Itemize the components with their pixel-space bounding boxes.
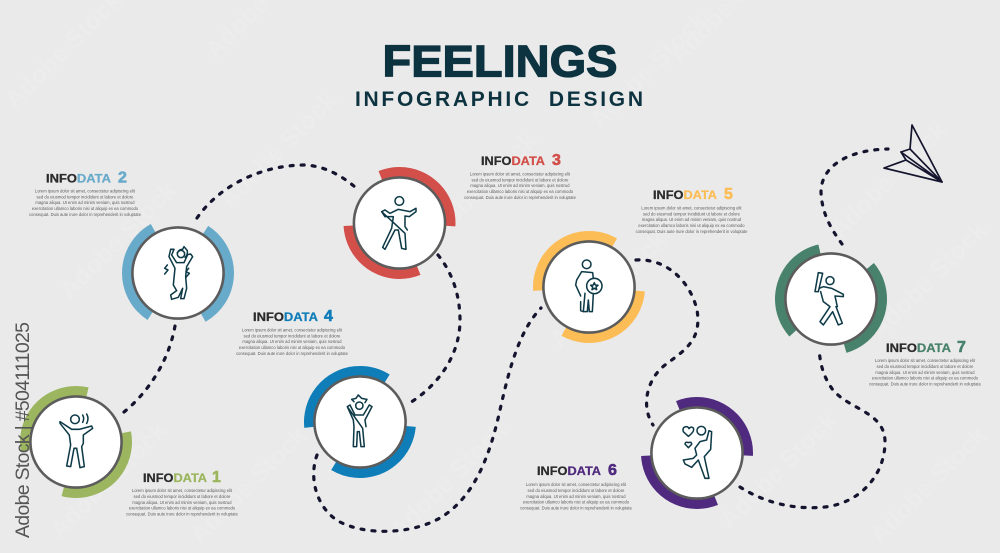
text: info data 5: Lorem ipsum dolor sit amet, consectetur adipiscing elit [641, 205, 742, 210]
text: info data 6: INFODATA [537, 464, 602, 478]
text: info data 3 [464, 152, 577, 200]
text: info data 2 [29, 170, 142, 217]
text: info data 5: sed do eiusmod tempor incididunt ut labore et dolore [643, 211, 741, 216]
text: info data 3: exercitation ullamco laboris nisi ut aliquip ex ea commodo [467, 189, 574, 194]
text: info data 3: INFODATA [481, 154, 546, 168]
text: info data 4: magna aliqua. Ut enim ad minim veniam, quis nostrud [242, 339, 342, 344]
icon: person shouting [60, 414, 93, 468]
text: info data 6: consequat. Duis aute irure dolor in reprehenderit in voluptate [520, 506, 633, 511]
faint diagonal watermarks: Adobe Stock [184, 421, 312, 549]
title: FEELINGS [382, 38, 618, 87]
faint diagonal watermarks: Adobe Stock [54, 176, 182, 304]
faint diagonal watermarks: Adobe Stock [824, 116, 952, 244]
panel: step 7 [759, 227, 903, 371]
faint diagonal watermarks: Adobe Stock [414, 126, 542, 254]
icon: person with open arms [382, 197, 416, 249]
faint diagonal watermarks: Adobe Stock [584, 6, 712, 134]
text: info data 7: magna aliqua. Ut enim ad minim veniam, quis nostrud [875, 370, 975, 375]
text: info data 3: consequat. Duis aute irure dolor in reprehenderit in voluptate [464, 195, 577, 200]
faint diagonal watermarks: Adobe Stock [714, 406, 842, 534]
text: info data 2: sed do eiusmod tempor incididunt ut labore et dolore [37, 194, 134, 199]
faint diagonal watermarks: Adobe Stock [214, 86, 342, 214]
text: info data 7: 7 [957, 339, 966, 356]
panel: step 1 [16, 382, 136, 502]
text: info data 7: INFODATA [886, 341, 952, 355]
text: info data 1 [126, 469, 239, 517]
text: info data 6: exercitation ullamco laboris nisi ut aliquip ex ea commodo [523, 500, 630, 505]
text: info data 4: sed do eiusmod tempor incididunt ut labore et dolore [244, 333, 341, 338]
text: info data 4: Lorem ipsum dolor sit amet, consectetur adipiscing elit [242, 327, 343, 332]
text: info data 1: magna aliqua. Ut enim ad minim veniam, quis nostrud [132, 500, 232, 505]
text: info data 5: exercitation ullamco laboris nisi ut aliquip ex ea commodo [638, 223, 745, 228]
panel: step 6 [631, 387, 763, 519]
text: info data 5 [636, 186, 748, 234]
text: info data 5: consequat. Duis aute irure dolor in reprehenderit in voluptate [636, 229, 748, 234]
text: info data 3: 3 [552, 152, 561, 169]
text: info data 7 [869, 339, 982, 387]
panel: step 4 [304, 366, 416, 478]
icon: person with baseball bat [815, 273, 843, 325]
text: info data 1: exercitation ullamco laboris nisi ut aliquip ex ea commodo [129, 506, 236, 511]
icon: person with hearts [683, 426, 712, 478]
icon: person with flame [165, 247, 193, 299]
subtitle: INFOGRAPHIC DESIGN [355, 88, 643, 111]
text: info data 7: exercitation ullamco laboris nisi ut aliquip ex ea commodo [872, 376, 979, 381]
text: info data 4: INFODATA [253, 310, 319, 324]
text: info data 1: consequat. Duis aute irure dolor in reprehenderit in voluptate [126, 512, 239, 517]
text: info data 3: Lorem ipsum dolor sit amet, consectetur adipiscing elit [470, 171, 571, 176]
text: info data 7: consequat. Duis aute irure dolor in reprehenderit in voluptate [869, 382, 982, 387]
text: info data 1: 1 [212, 469, 221, 486]
faint diagonal watermarks: Adobe Stock [544, 226, 672, 354]
text: info data 4: consequat. Duis aute irure dolor in reprehenderit in voluptate [236, 351, 349, 356]
icon: person with star shield [576, 260, 602, 312]
faint diagonal watermarks: Adobe Stock [44, 416, 172, 544]
faint diagonal watermarks: Adobe Stock [384, 416, 512, 544]
text: info data 2: magna aliqua. Ut enim ad minim veniam, quis nostrud [35, 200, 135, 205]
text: info data 2: Lorem ipsum dolor sit amet, consectetur adipiscing elit [35, 188, 136, 193]
panel: step 2 [107, 202, 249, 344]
text: info data 2: consequat. Duis aute irure dolor in reprehenderit in voluptate [29, 212, 142, 217]
icon: paper plane [884, 125, 942, 182]
text: info data 3: sed do eiusmod tempor incididunt ut labore et dolore [472, 177, 569, 182]
text: info data 5: INFODATA [653, 188, 718, 202]
faint diagonal watermarks: Adobe Stock [864, 216, 992, 344]
text: info data 2: INFODATA [46, 172, 112, 186]
dashed route connecting the steps [124, 149, 888, 531]
text: info data 4 [236, 308, 349, 356]
stock id caption: Adobe Stock | #504111025 [12, 322, 34, 538]
text: info data 6 [520, 462, 633, 511]
text: info data 1: Lorem ipsum dolor sit amet, consectetur adipiscing elit [132, 488, 233, 493]
text: info data 7: sed do eiusmod tempor incididunt ut labore et dolore [877, 364, 974, 369]
text: info data 7: Lorem ipsum dolor sit amet, consectetur adipiscing elit [875, 358, 976, 363]
panel: step 5 [534, 232, 644, 342]
text: info data 4: exercitation ullamco laboris nisi ut aliquip ex ea commodo [239, 345, 346, 350]
icon: person with raised arms [347, 395, 372, 447]
text: info data 3: magna aliqua. Ut enim ad minim veniam, quis nostrud [470, 183, 570, 188]
text: info data 2: 2 [118, 170, 127, 186]
text: info data 6: sed do eiusmod tempor incididunt ut labore et dolore [528, 488, 625, 493]
text: info data 1: sed do eiusmod tempor incididunt ut labore et dolore [134, 494, 231, 499]
text: info data 6: magna aliqua. Ut enim ad minim veniam, quis nostrud [526, 494, 626, 499]
panel: step 3 [333, 157, 466, 289]
text: info data 6: Lorem ipsum dolor sit amet, consectetur adipiscing elit [526, 482, 627, 487]
text: info data 5: magna aliqua. Ut enim ad minim veniam, quis nostrud [642, 217, 742, 222]
text: info data 6: 6 [608, 462, 617, 479]
text: info data 4: 4 [324, 308, 333, 325]
faint diagonal watermarks: Adobe Stock [864, 421, 992, 549]
text: info data 1: INFODATA [143, 471, 208, 485]
text: info data 5: 5 [724, 186, 733, 203]
text: info data 2: exercitation ullamco laboris nisi ut aliquip ex ea commodo [32, 206, 139, 211]
